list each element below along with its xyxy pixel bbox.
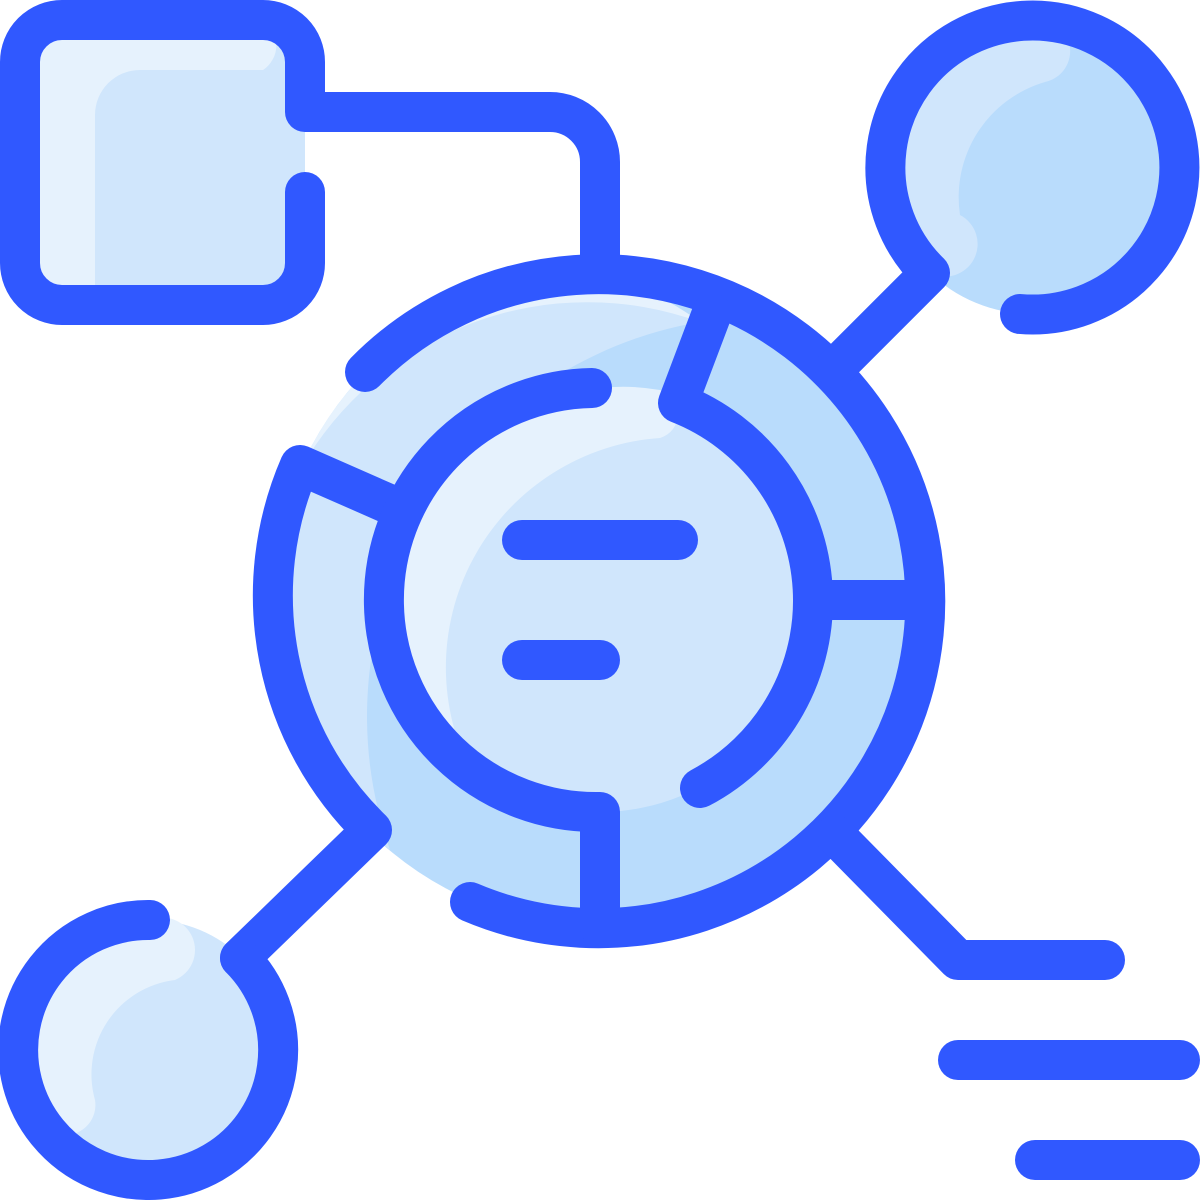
outer ring main arc — [365, 274, 925, 928]
inner ring left arc — [384, 388, 600, 927]
center lines — [522, 520, 678, 560]
top-right node — [835, 21, 1179, 368]
ring divider — [812, 580, 927, 620]
bottom-left node — [18, 920, 278, 1180]
outer ring left arc with connector — [240, 465, 398, 958]
bottom-right connector and text lines — [835, 835, 1105, 960]
icon: top-left square with connector — [20, 20, 600, 305]
inner ring right arc — [678, 313, 813, 788]
